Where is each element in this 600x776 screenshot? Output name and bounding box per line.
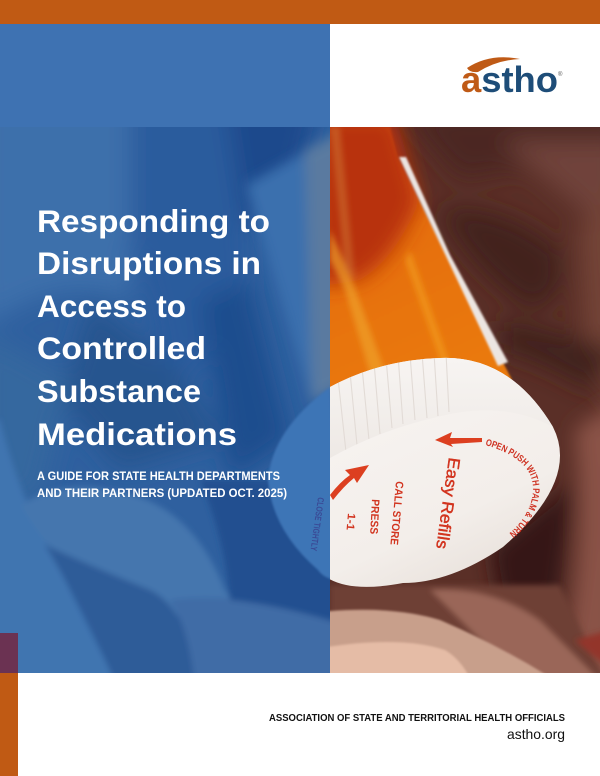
arrow: close direction [330,465,369,500]
bottle label edge [244,132,330,401]
upper right hand [419,127,600,389]
footer: website: astho.org [507,726,565,742]
subtitle: AND THEIR PARTNERS (UPDATED OCT. 2025) [37,486,287,500]
tinted text: close tightly: CLOSE TIGHTLY [309,497,326,552]
footer: organisation name: ASSOCIATION OF STATE AND TERRITORIAL HEALTH OFFICIALS [269,712,565,724]
title: Medications [37,416,237,452]
right hand lower [490,400,600,690]
top orange bar [0,0,600,24]
panel: blue title block [0,24,330,673]
cap body [330,358,560,587]
title: Disruptions in [37,245,261,281]
subtitle: A GUIDE FOR STATE HEALTH DEPARTMENTS [37,469,280,483]
cap under blue tint [268,388,330,580]
text: 1-1: 1-1 [344,513,357,531]
cap lettering [330,432,540,548]
text: press: PRESS [367,499,381,534]
text: open push with palm and turn: OPEN PUSH WITH PALM & TURN [486,439,540,538]
text: easy refills: Easy Refills [432,456,463,550]
left orange accent [0,673,18,776]
logo swoosh [467,57,520,72]
lower tinted hand [0,422,330,673]
logo registered mark: ® [558,71,563,78]
subtitle [37,469,287,500]
title: Access to [37,288,186,324]
title [37,203,270,452]
bottle red shadow [315,115,420,285]
lower hand [330,582,600,673]
bottle highlights [330,127,452,380]
logo wordmark: astho [461,59,558,100]
text: call store: CALL STORE [387,481,405,546]
title: Substance [37,373,201,409]
bottle white edge [399,157,508,366]
title: Responding to [37,203,270,239]
cap ribbed edge [330,353,553,458]
logo: astho [461,57,563,100]
arrow: open direction [435,432,482,447]
bottle cap [330,358,560,587]
title: Controlled [37,330,206,366]
photo under blue tint [0,127,330,673]
left maroon accent [0,633,18,673]
photo: hands holding pill bottle [330,127,600,673]
pill bottle [330,127,513,387]
